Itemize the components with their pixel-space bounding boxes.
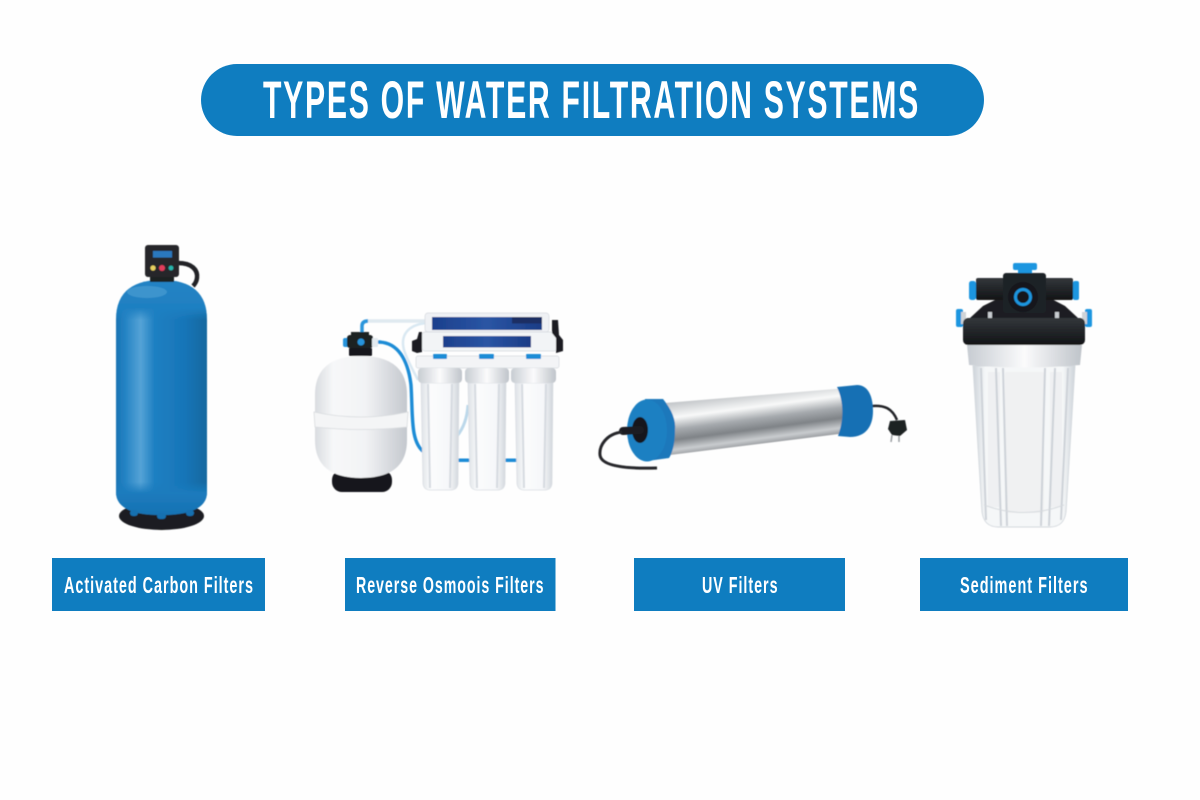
label: reverse osmosis filters (345, 558, 556, 611)
left end cap (627, 399, 675, 462)
label: activated carbon filters (52, 558, 265, 611)
side ports (956, 309, 963, 327)
stainless steel tube (665, 388, 847, 455)
icon: sediment filter (956, 263, 1092, 527)
label: sediment filters (920, 558, 1128, 611)
pleated cartridge (1005, 372, 1044, 513)
collar (967, 345, 1082, 368)
upper feed tube (362, 321, 426, 333)
clear bowl (973, 366, 1075, 527)
filter housing 1 (418, 368, 462, 490)
icon: reverse osmosis system (314, 313, 563, 492)
right end cap (837, 385, 873, 437)
cable (178, 263, 197, 286)
label: sediment filters: Sediment Filters (960, 572, 1088, 598)
icon: UV filter (600, 385, 907, 468)
title banner (201, 64, 984, 136)
blue tube (378, 342, 424, 452)
storage tank (314, 356, 408, 492)
icon: activated carbon filter tank (116, 245, 207, 530)
filter housing 2 (465, 368, 509, 490)
membrane cartridges (412, 313, 563, 353)
label: UV filters: UV Filters (702, 572, 778, 598)
valve (343, 332, 378, 356)
control head (145, 245, 179, 282)
power cord right (872, 406, 907, 442)
label: UV filters (634, 558, 845, 611)
pale tube (403, 323, 426, 380)
blue connectors (457, 458, 470, 462)
black head (963, 273, 1085, 345)
filter housing 3 (511, 368, 556, 490)
power cord left (600, 430, 657, 468)
mounting bracket (416, 354, 559, 368)
label: activated carbon filters: Activated Carbon Filters (64, 572, 254, 598)
label: reverse osmosis filters: Reverse Osmoois Filters (356, 572, 544, 598)
